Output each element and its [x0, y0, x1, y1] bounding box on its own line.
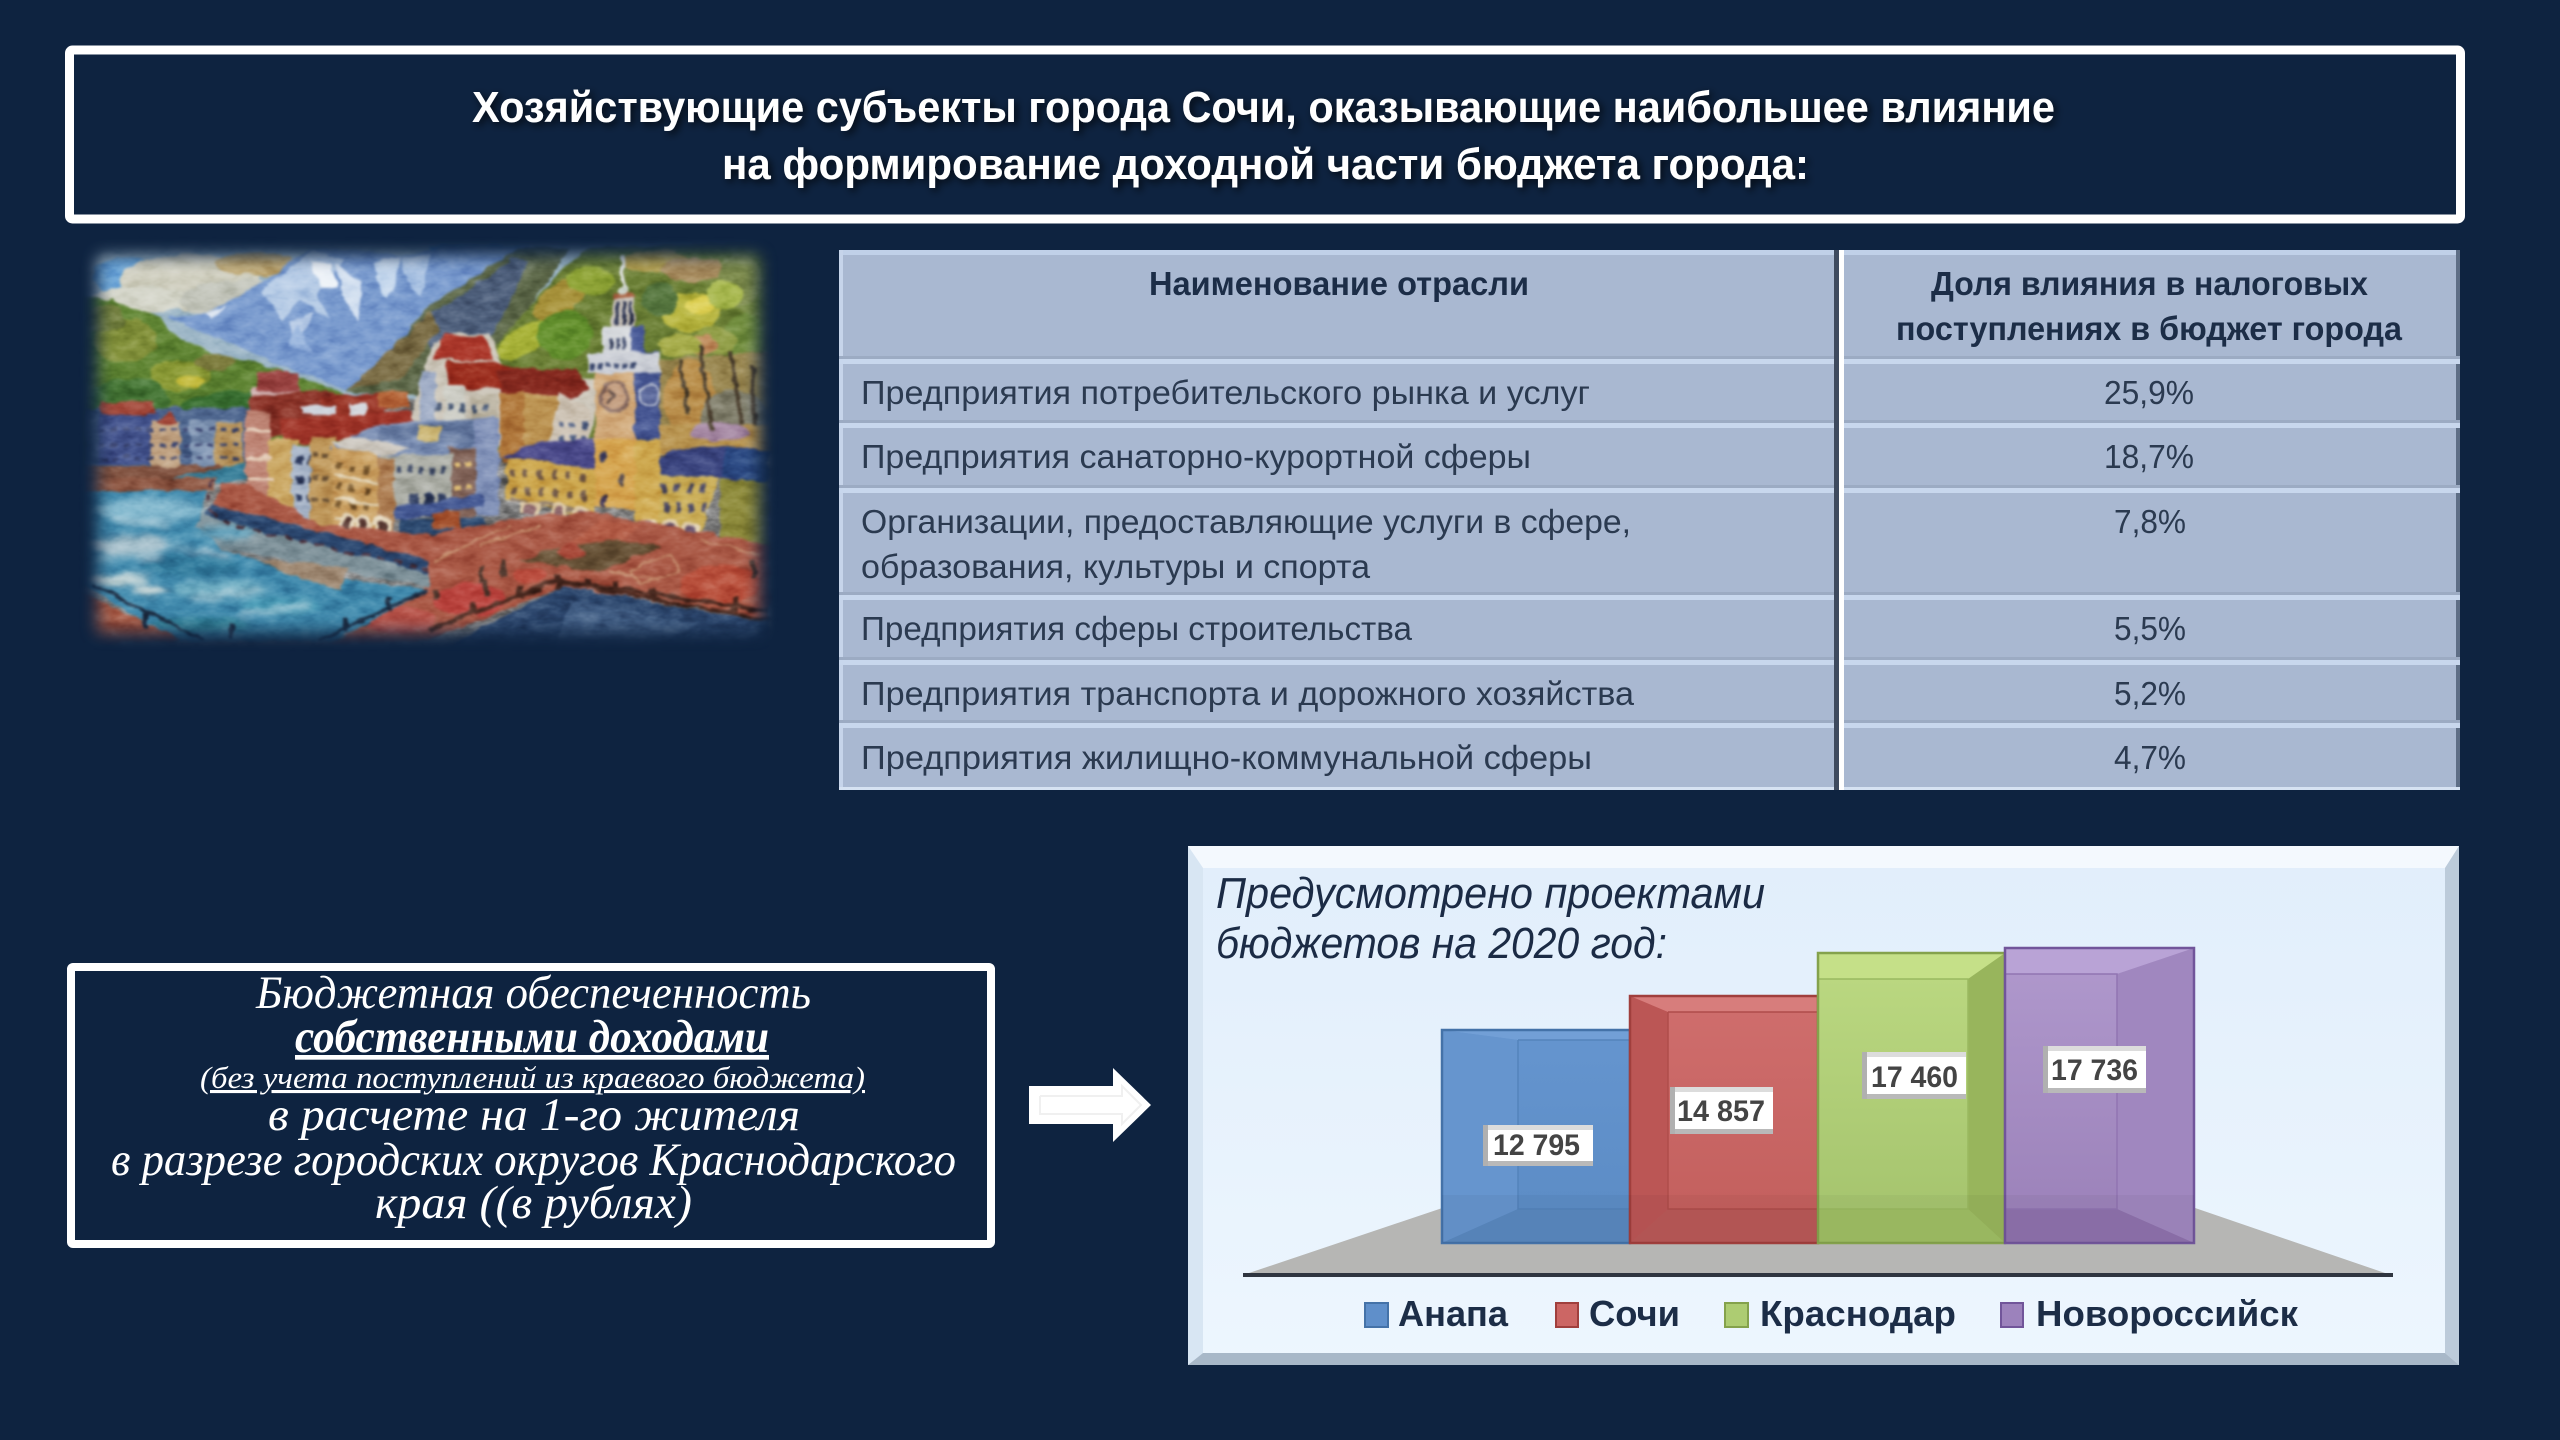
title text: Хозяйствующие субъекты города Сочи, оказывающие наибольшее влияние [472, 83, 2055, 132]
bar: Сочи 14 857 [1630, 996, 1818, 1243]
table row 6: Предприятия жилищно-коммунальной сферы [861, 739, 1592, 776]
floor shadow through bars [1442, 1195, 2194, 1243]
left green hill [86, 296, 345, 448]
far left town [88, 404, 252, 468]
description text: Бюджетная обеспеченность [255, 967, 811, 1019]
data label 17 460: 17 460 [1871, 1061, 1958, 1094]
description text: в разрезе городских округов Краснодарского [111, 1134, 956, 1186]
chart panel [1188, 846, 2459, 1365]
arrow [1029, 1068, 1151, 1142]
table header: Наименование отрасли [1149, 265, 1529, 302]
data label 12 795 [1483, 1125, 1593, 1166]
bar: Анапа 12 795 [1442, 1030, 1630, 1243]
title text: на формирование доходной части бюджета города: [722, 140, 1809, 189]
description text: (без учета поступлений из краевого бюджета) [200, 1060, 865, 1095]
railing on near banks [92, 480, 430, 640]
painting of Sochi waterfront [80, 240, 780, 650]
table row 1: 25,9% [2104, 374, 2194, 411]
chart title [1216, 869, 1765, 968]
table background [839, 250, 2460, 790]
far brown mountain [347, 248, 570, 400]
table row 6 [861, 739, 2186, 776]
table row 5: Предприятия транспорта и дорожного хозяйства [861, 675, 1635, 712]
dark embankment water [462, 584, 768, 643]
snow mountain [168, 246, 530, 390]
lower left bank [88, 598, 176, 641]
river [82, 490, 430, 642]
floor baseline [1243, 1273, 2393, 1277]
budget description box [71, 967, 991, 1244]
table row 3: Организации, предоставляющие услуги в сфере, [861, 503, 1631, 540]
description text [111, 967, 956, 1229]
legend: Новороссийск: Новороссийск [2036, 1293, 2299, 1334]
title text [472, 83, 2055, 189]
table [839, 250, 2460, 790]
table row 5 [861, 675, 2186, 712]
slate roofed central block [330, 416, 499, 548]
bar: Краснодар 17 460 [1818, 953, 2005, 1243]
data label 17 736 [2043, 1046, 2146, 1093]
left wing of town hall [500, 438, 595, 522]
table header: поступлениях в бюджет города [1896, 310, 2403, 347]
description text: собственными доходами [295, 1011, 769, 1063]
table row 2 [861, 438, 2194, 475]
description text: в расчете на 1-го жителя [268, 1089, 800, 1141]
far river [174, 461, 248, 485]
data label 14 857: 14 857 [1677, 1095, 1765, 1128]
title box [70, 50, 2460, 219]
trees and sunlit ground [658, 351, 766, 426]
tan corner building [330, 438, 410, 540]
plaza railing [430, 574, 770, 630]
table row 1: Предприятия потребительского рынка и услуг [861, 374, 1590, 411]
legend: Сочи: Сочи [1589, 1293, 1680, 1334]
upper row of red-roofed houses [412, 332, 600, 462]
chart title: Предусмотрено проектами [1216, 869, 1765, 918]
table bevels [839, 250, 2460, 790]
table row 2: 18,7% [2104, 438, 2194, 475]
table row 4: Предприятия сферы строительства [861, 610, 1413, 647]
table row 5: 5,2% [2114, 675, 2186, 712]
right autumn hill [490, 240, 780, 450]
data label 14 857 [1670, 1087, 1773, 1134]
clock tower [588, 254, 660, 520]
sky [88, 245, 587, 400]
river foam and currents [90, 498, 320, 632]
data label 17 460 [1862, 1052, 1966, 1099]
table header: Доля влияния в налоговых [1931, 265, 2369, 302]
legend: Краснодар: Краснодар [1760, 1293, 1956, 1334]
table header [1149, 265, 2403, 347]
far embankment [85, 478, 217, 492]
legend: Анапа: Анапа [1398, 1293, 1509, 1334]
description text: края ((в рублях) [375, 1177, 692, 1229]
table row 3: образования, культуры и спорта [861, 548, 1371, 585]
table row 3 [861, 503, 2186, 585]
table row 4 [861, 610, 2186, 647]
plaza and promenade [213, 482, 770, 645]
legend [1365, 1293, 2299, 1334]
table row 1 [861, 374, 2194, 411]
table row 2: Предприятия санаторно-курортной сферы [861, 438, 1531, 475]
chart title: бюджетов на 2020 год: [1216, 919, 1667, 968]
left red-roofed block [245, 372, 415, 540]
table row 4: 5,5% [2114, 610, 2186, 647]
data label 17 736: 17 736 [2051, 1054, 2138, 1087]
table row 6: 4,7% [2114, 739, 2186, 776]
chart floor [1249, 1195, 2385, 1273]
panel frame [1188, 846, 2459, 1365]
right wing of town hall [636, 446, 770, 548]
table row 3: 7,8% [2114, 503, 2186, 540]
data label 12 795: 12 795 [1493, 1129, 1580, 1162]
bar: Новороссийск 17 736 [2005, 948, 2194, 1243]
